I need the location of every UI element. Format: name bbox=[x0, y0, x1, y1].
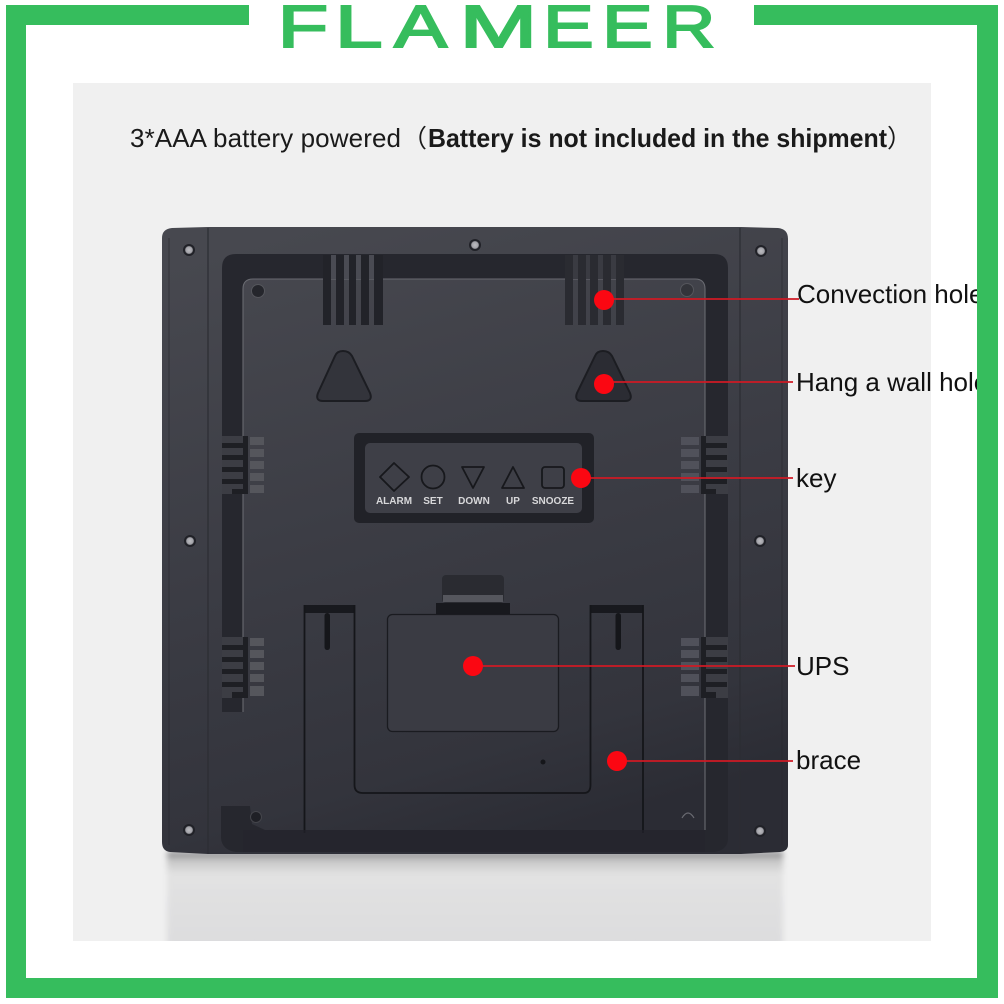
wall hanging holes bbox=[317, 351, 631, 401]
key labels bbox=[376, 496, 574, 507]
brand title bbox=[278, 0, 715, 60]
callout: key bbox=[571, 463, 836, 493]
plate screws bbox=[250, 284, 694, 822]
battery heading: ） bbox=[887, 125, 912, 153]
key labels: SET bbox=[423, 496, 443, 507]
battery heading: Battery is not included in the shipment bbox=[428, 123, 887, 153]
small pinhole bbox=[540, 760, 546, 764]
device body bbox=[162, 227, 788, 854]
top vents bbox=[323, 255, 624, 325]
icon: alarm diamond bbox=[380, 463, 409, 491]
side vents bbox=[222, 436, 728, 698]
icon: set circle bbox=[422, 466, 444, 488]
fold-out stand bbox=[243, 605, 705, 852]
corner screws bbox=[183, 239, 767, 837]
callout: convection hole bbox=[594, 284, 977, 310]
callout: wall hole: Hang a wall hole bbox=[796, 367, 988, 397]
key labels: ALARM bbox=[376, 496, 412, 507]
battery heading: （ bbox=[402, 125, 427, 153]
battery heading bbox=[130, 123, 912, 153]
inner plate bbox=[243, 279, 705, 830]
recessed channel bbox=[221, 254, 728, 852]
callout: UPS bbox=[463, 651, 849, 681]
key labels: DOWN bbox=[458, 496, 490, 507]
key panel bbox=[354, 433, 594, 523]
callout: UPS: UPS bbox=[796, 651, 849, 681]
battery door bbox=[388, 575, 558, 732]
callout: brace: brace bbox=[796, 745, 861, 775]
icon: up triangle bbox=[502, 467, 524, 488]
stand slots bbox=[324, 613, 330, 650]
callout: wall hole bbox=[594, 372, 977, 396]
key labels: UP bbox=[506, 496, 520, 507]
callout: brace bbox=[607, 745, 861, 775]
icon: snooze square bbox=[542, 467, 564, 488]
photo background bbox=[73, 83, 931, 941]
battery heading: 3*AAA battery powered bbox=[130, 123, 401, 153]
callout: convection hole: Convection hole bbox=[797, 279, 983, 309]
device back panel bbox=[162, 227, 788, 854]
device shadow reflection bbox=[164, 850, 786, 941]
key labels: SNOOZE bbox=[532, 496, 574, 507]
icon: down triangle bbox=[462, 467, 484, 488]
callout: key: key bbox=[796, 463, 836, 493]
